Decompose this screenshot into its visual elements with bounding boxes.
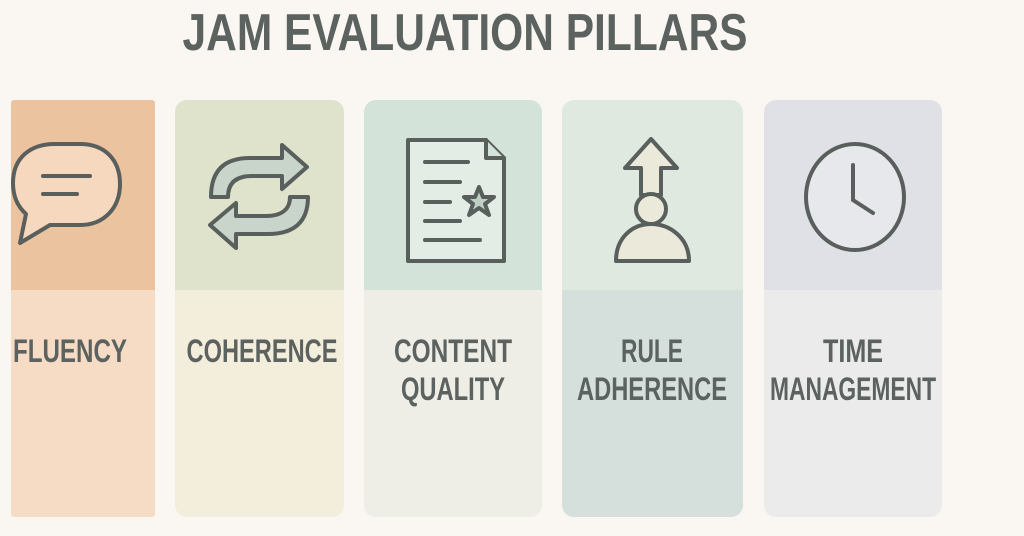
panel: content quality	[364, 100, 542, 517]
icon: cycle arrows	[210, 145, 308, 248]
label: coherence: COHERENCE	[186, 333, 338, 369]
icon: clock	[806, 144, 904, 250]
panel: content quality: QUALITY	[401, 371, 505, 407]
panel: fluency	[0, 100, 155, 517]
label: rule adherence: RULE	[621, 333, 683, 369]
icon: person with arrow	[616, 139, 689, 261]
label: content quality: CONTENT	[394, 333, 512, 369]
panel: rule adherence	[562, 100, 743, 517]
icon: speech bubble	[13, 144, 120, 243]
panel: time management	[764, 100, 942, 517]
panel: rule adherence: ADHERENCE	[577, 371, 727, 407]
panel: coherence	[175, 100, 344, 517]
label: time management: TIME	[823, 333, 883, 369]
panel: time management: MANAGEMENT	[770, 371, 936, 407]
label: fluency: FLUENCY	[13, 333, 127, 369]
icon: document with star	[408, 140, 504, 261]
title: JAM EVALUATION PILLARS	[182, 4, 748, 62]
